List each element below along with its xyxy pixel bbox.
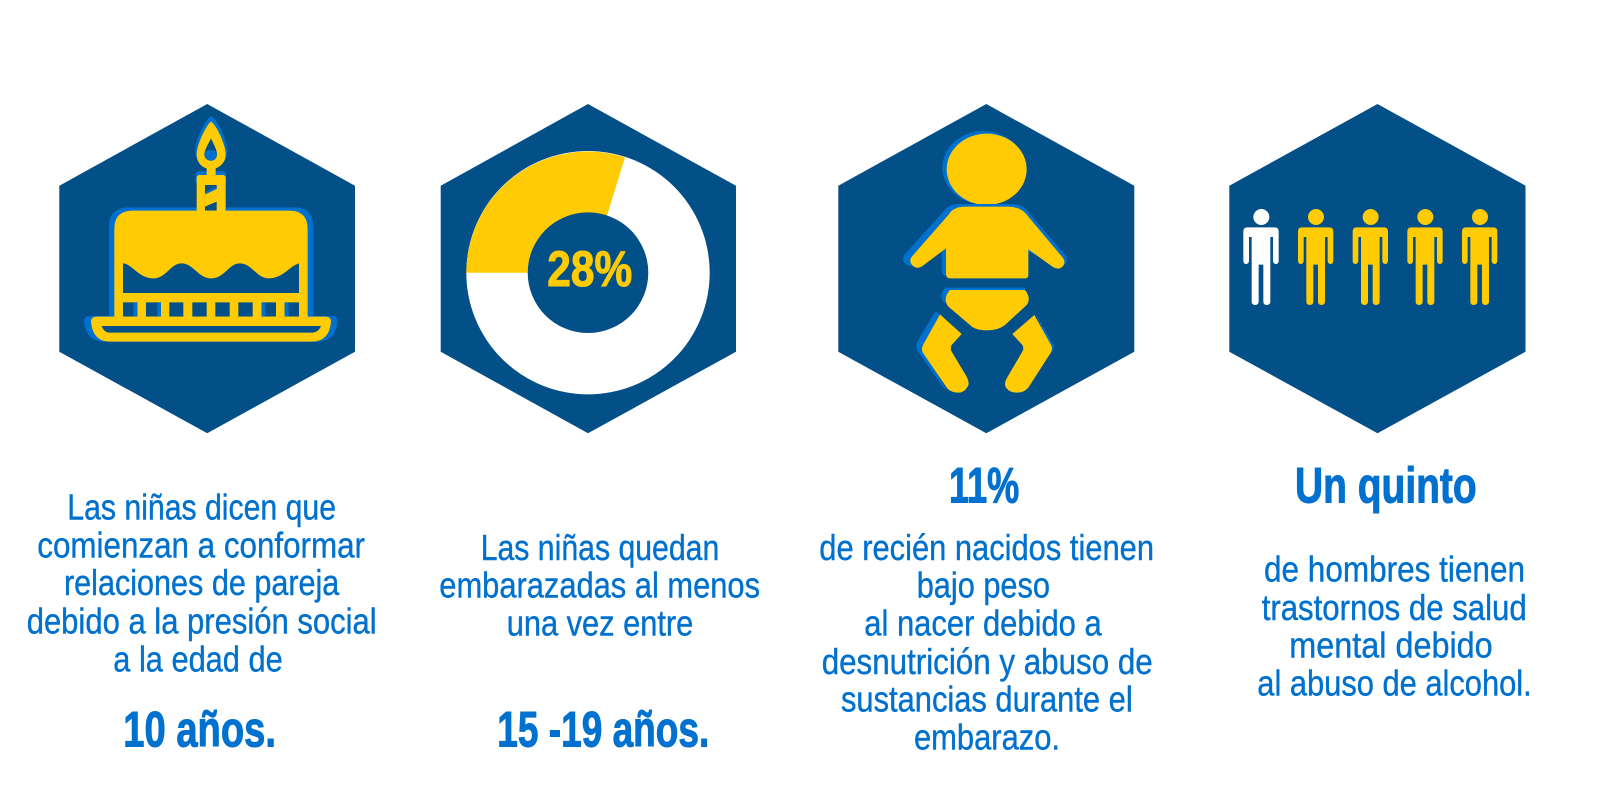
icon: baby xyxy=(903,131,1067,393)
person: white xyxy=(1243,209,1279,305)
icon: birthday cake xyxy=(84,116,337,342)
text: girls age description xyxy=(27,486,377,680)
donut value: 28% xyxy=(547,241,632,297)
person: yellow 3 xyxy=(1407,209,1443,305)
text: pregnancy description: embarazadas al menos xyxy=(439,564,760,605)
hexagon background: donut xyxy=(441,104,736,433)
text: pregnancy description xyxy=(439,527,760,644)
text: pregnancy description: una vez entre xyxy=(507,603,693,644)
text: newborn description: desnutrición y abuso de xyxy=(822,641,1153,682)
highlight: 11%: 11% xyxy=(949,457,1019,513)
text: girls age description: Las niñas dicen que xyxy=(67,486,336,527)
text: newborn description: al nacer debido a xyxy=(864,603,1103,644)
text: newborn description xyxy=(819,527,1154,757)
hexagon background: baby xyxy=(838,104,1134,433)
hexagon background: people xyxy=(1229,104,1526,433)
text: girls age description: comienzan a conformar xyxy=(37,524,365,565)
text: girls age description: relaciones de pareja xyxy=(64,562,340,603)
panel: donut, 28% xyxy=(439,104,760,758)
hexagon background: cake xyxy=(59,104,355,433)
highlight: Un quinto: Un quinto xyxy=(1295,457,1477,513)
text: pregnancy description: Las niñas quedan xyxy=(481,527,719,568)
icon: five people, one highlighted xyxy=(1243,209,1497,305)
highlight: 15-19 años: 15 -19 años. xyxy=(497,702,709,758)
donut chart: 28% xyxy=(466,151,710,394)
text: newborn description: de recién nacidos tienen xyxy=(819,527,1154,568)
person: yellow 1 xyxy=(1298,209,1333,305)
text: girls age description: a la edad de xyxy=(113,639,283,680)
text: men description: trastornos de salud xyxy=(1262,587,1527,628)
panel: baby, 11% xyxy=(819,104,1154,757)
text: girls age description: debido a la presión social xyxy=(27,600,377,641)
text: men description xyxy=(1257,549,1532,704)
person: yellow 2 xyxy=(1353,209,1388,305)
text: newborn description: embarazo. xyxy=(914,716,1060,757)
person: yellow 4 xyxy=(1462,209,1497,305)
text: newborn description: bajo peso xyxy=(917,565,1050,606)
highlight: 10 años: 10 años. xyxy=(123,702,276,758)
panel: cake, age 10 xyxy=(27,104,377,758)
text: newborn description: sustancias durante el xyxy=(841,679,1133,720)
text: men description: mental debido xyxy=(1289,624,1493,665)
panel: men, one fifth xyxy=(1229,104,1532,704)
text: men description: al abuso de alcohol. xyxy=(1257,663,1532,704)
text: men description: de hombres tienen xyxy=(1264,549,1525,590)
